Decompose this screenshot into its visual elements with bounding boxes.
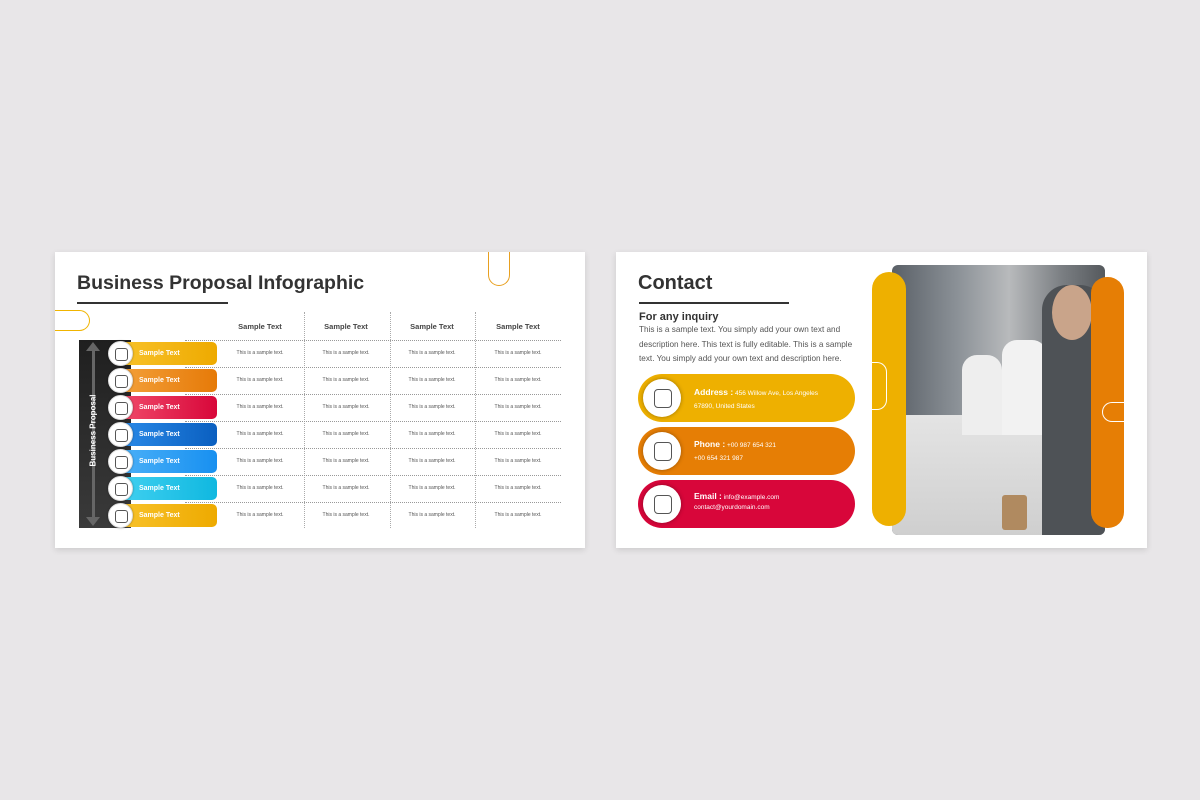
rows: colored tabs: Sample Text — [139, 485, 180, 492]
pill: phone — [638, 427, 855, 475]
table: This is a sample text. — [323, 485, 369, 491]
text block: inquiry: This is a sample text. You simply add your own text and description here. This text is fully editable. This is a sample text. You simply add your own text and description here. — [639, 325, 852, 363]
table: This is a sample text. — [495, 512, 541, 518]
rows: colored tabs: Sample Text — [139, 350, 180, 357]
pill: phone: Phone : +00 987 654 321 — [694, 439, 776, 449]
decoration: orange bar — [1091, 277, 1124, 528]
table: This is a sample text. — [237, 350, 283, 356]
panel: business proposal slide — [55, 252, 585, 548]
table: This is a sample text. — [409, 404, 455, 410]
pill: address: 67890, United States — [694, 403, 755, 410]
photo — [892, 265, 1105, 535]
table: This is a sample text. — [237, 485, 283, 491]
pill: address — [638, 374, 855, 422]
table: This is a sample text. — [237, 377, 283, 383]
title: Contact — [638, 272, 712, 294]
table: Sample Text — [496, 322, 540, 331]
table: This is a sample text. — [323, 431, 369, 437]
pill: email — [638, 480, 855, 528]
table: This is a sample text. — [323, 458, 369, 464]
rows: colored tabs: Sample Text — [139, 458, 180, 465]
rows: colored tabs: Sample Text — [139, 512, 180, 519]
table — [185, 312, 561, 528]
table: This is a sample text. — [495, 404, 541, 410]
table: This is a sample text. — [495, 431, 541, 437]
table: This is a sample text. — [323, 512, 369, 518]
table: This is a sample text. — [323, 350, 369, 356]
decoration: orange clip — [488, 246, 510, 286]
decoration: yellow half pill — [45, 310, 90, 331]
pill: email: Email : info@example.com — [694, 491, 779, 501]
table: This is a sample text. — [409, 350, 455, 356]
rows: colored tabs: Sample Text — [139, 404, 180, 411]
table: This is a sample text. — [409, 458, 455, 464]
pill: email: contact@yourdomain.com — [694, 504, 770, 511]
dark side bar: Business Proposal — [88, 394, 98, 467]
table: Sample Text — [324, 322, 368, 331]
table: This is a sample text. — [237, 512, 283, 518]
pill: phone: +00 654 321 987 — [694, 455, 743, 462]
text block: inquiry: For any inquiry — [639, 311, 718, 323]
table: This is a sample text. — [237, 431, 283, 437]
table: This is a sample text. — [237, 458, 283, 464]
table: This is a sample text. — [409, 431, 455, 437]
rows: colored tabs: Sample Text — [139, 377, 180, 384]
table: This is a sample text. — [323, 404, 369, 410]
table: This is a sample text. — [495, 458, 541, 464]
table: This is a sample text. — [323, 377, 369, 383]
table: This is a sample text. — [495, 485, 541, 491]
panel: contact slide — [616, 252, 1147, 548]
table: Sample Text — [238, 322, 282, 331]
rows: colored tabs: Sample Text — [139, 431, 180, 438]
table: This is a sample text. — [409, 485, 455, 491]
dark side bar — [79, 340, 131, 528]
table: This is a sample text. — [237, 404, 283, 410]
table: This is a sample text. — [409, 377, 455, 383]
table: This is a sample text. — [409, 512, 455, 518]
rows: colored tabs — [108, 340, 217, 530]
pill: address: Address : 456 Willow Ave, Los Angeles — [694, 387, 818, 397]
table: This is a sample text. — [495, 377, 541, 383]
title: Business Proposal Infographic — [77, 272, 364, 294]
table: Sample Text — [410, 322, 454, 331]
decoration: yellow bar — [872, 272, 906, 526]
table: This is a sample text. — [495, 350, 541, 356]
